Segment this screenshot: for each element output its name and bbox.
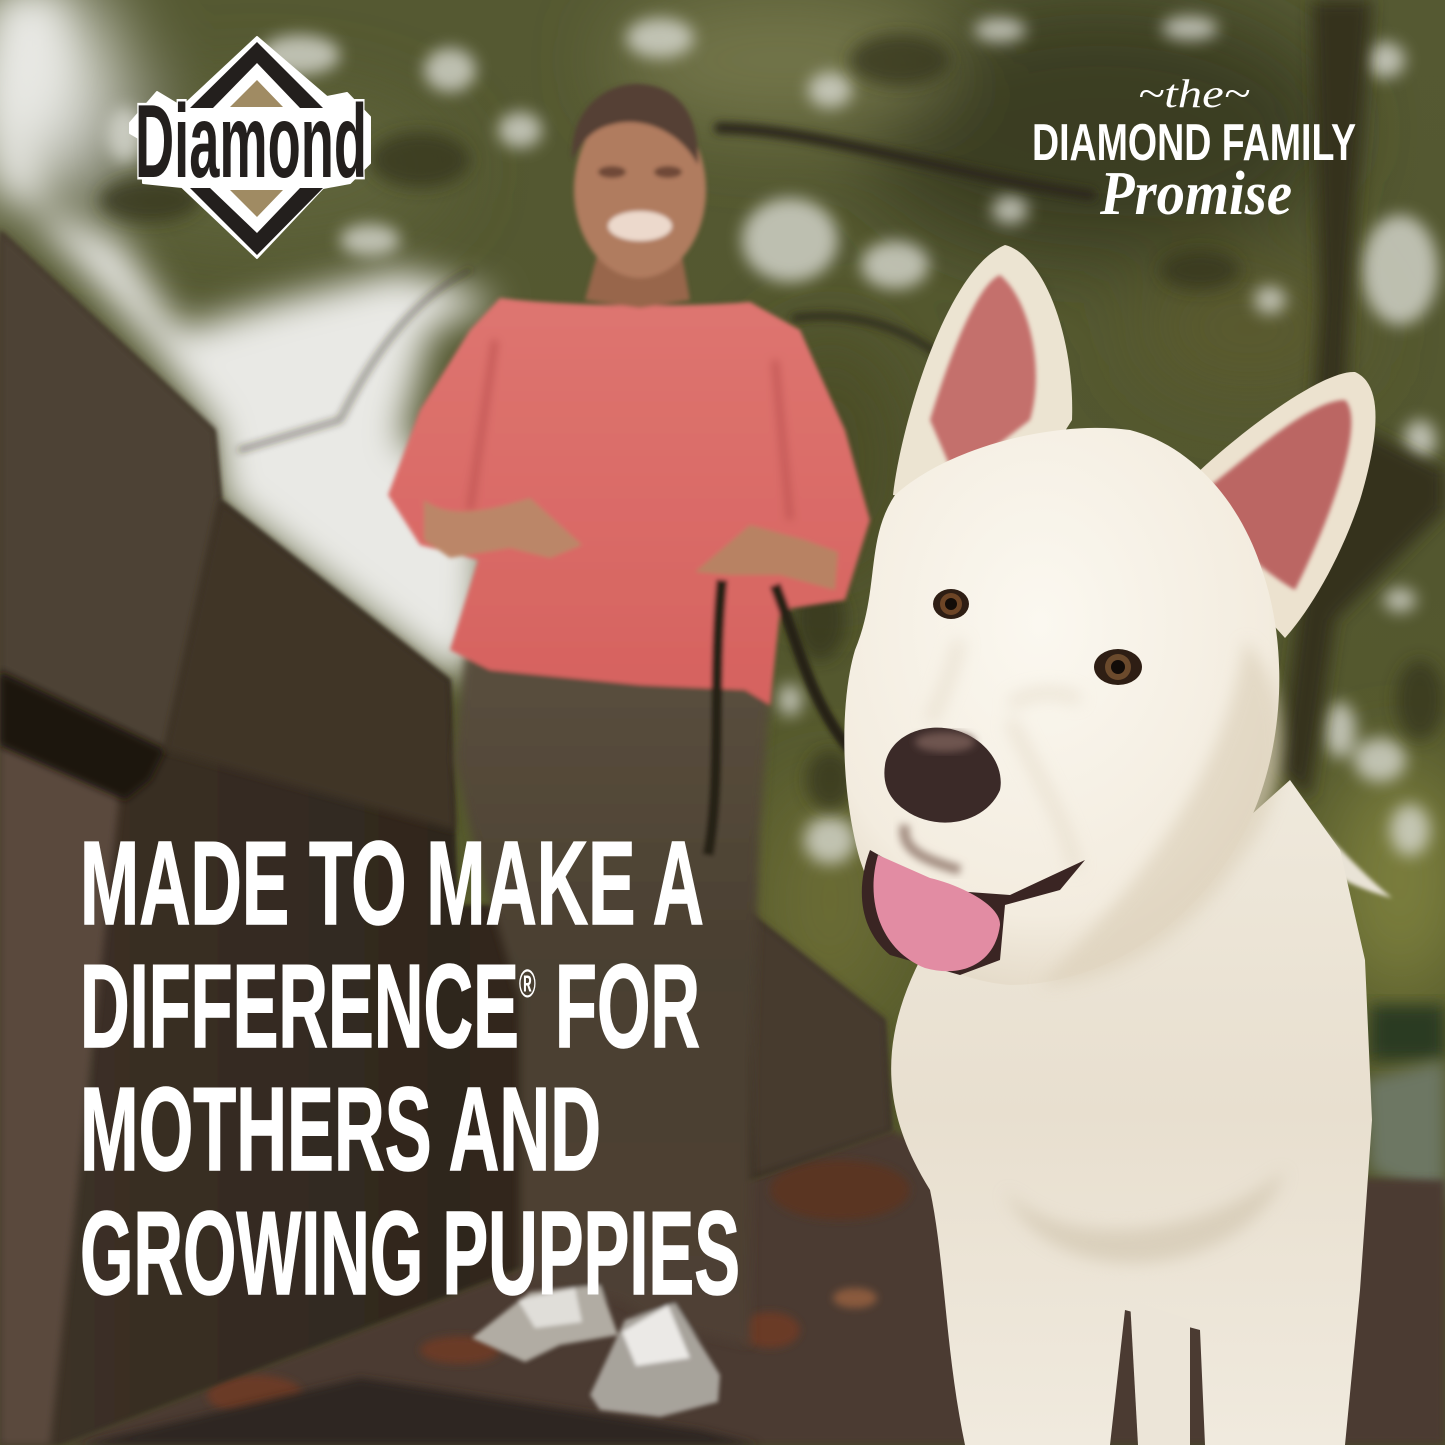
tree trunk	[1280, 0, 1445, 800]
mouth and tongue	[862, 850, 1085, 975]
headline	[80, 817, 740, 1320]
headline: MADE TO MAKE A	[80, 817, 704, 950]
ground path	[60, 1130, 1445, 1445]
foliage bokeh	[107, 16, 1438, 864]
foliage dark patches	[100, 34, 1444, 810]
far leg	[1130, 1300, 1190, 1445]
white diamond backing	[130, 37, 370, 258]
headline: GROWING PUPPIES	[80, 1187, 740, 1320]
branches	[240, 128, 1090, 450]
woman walking the dog	[388, 84, 870, 1417]
stone wall	[0, 230, 892, 1445]
shoes	[472, 1285, 720, 1417]
pants	[455, 655, 770, 1345]
gold triangles	[230, 80, 283, 217]
muzzle shading	[930, 640, 1080, 870]
sweater	[388, 298, 870, 705]
puppy body	[891, 780, 1372, 1445]
fallen leaves	[207, 1160, 910, 1415]
headline: ®	[519, 962, 536, 1006]
left ear	[893, 245, 1072, 500]
arms and hands	[424, 498, 582, 558]
tagline: the Diamond Family Promise	[1032, 71, 1356, 228]
headline: MOTHERS AND	[80, 1063, 601, 1196]
tail	[1295, 815, 1392, 898]
right ear	[1190, 372, 1376, 638]
headline: DIFFERENCE	[80, 940, 840, 1073]
Diamond logo	[130, 37, 370, 258]
white puppy	[844, 245, 1392, 1445]
headline: FOR	[536, 940, 700, 1073]
hair	[572, 84, 698, 165]
puppy head	[844, 428, 1279, 985]
neck and face	[585, 245, 690, 308]
tagline: the Diamond Family Promise: Promise	[1099, 160, 1292, 228]
black chevrons	[190, 42, 323, 255]
tagline: the Diamond Family Promise: ~the~	[1138, 71, 1250, 116]
leash	[708, 580, 850, 855]
nose	[884, 728, 1001, 823]
ground foliage right	[1370, 1005, 1445, 1060]
eyes	[933, 589, 1142, 685]
wordmark: Diamond	[135, 84, 367, 200]
sky patch behind woman	[0, 0, 500, 680]
